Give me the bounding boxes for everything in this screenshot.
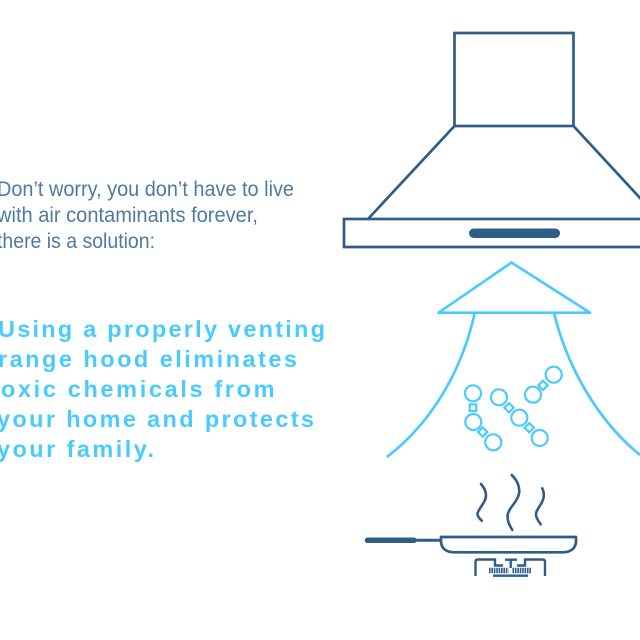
solution statement: range hood eliminates — [0, 346, 297, 372]
hood base — [344, 219, 640, 247]
intro text block: with air contaminants forever, — [0, 204, 258, 227]
solution statement: your home and protects — [0, 406, 314, 432]
icon: range hood — [344, 33, 640, 247]
arrow: air rising into hood — [387, 262, 640, 457]
pan handle — [368, 538, 414, 543]
burner centre post — [505, 560, 517, 568]
icon: gas burner — [476, 560, 545, 576]
burner right support — [517, 560, 545, 576]
hood canopy — [368, 126, 640, 219]
solution statement: your family. — [0, 436, 154, 462]
burner base — [493, 575, 528, 577]
intro text block: Don’t worry, you don’t have to live — [0, 178, 294, 201]
pan body — [441, 537, 576, 552]
icon: frying pan — [368, 537, 576, 552]
right air flow curve — [554, 313, 640, 455]
hood chimney — [454, 33, 574, 126]
left air flow curve — [387, 313, 475, 457]
hood light bar — [469, 228, 560, 238]
solution statement — [0, 316, 325, 462]
icon: contaminant molecules — [465, 367, 562, 450]
intro text block — [0, 178, 294, 253]
solution statement: Using a properly venting — [0, 316, 325, 342]
molecule: left — [465, 385, 501, 450]
burner flame ports — [489, 568, 531, 573]
intro text block: there is a solution: — [0, 230, 155, 253]
icon: steam — [477, 475, 544, 530]
molecule: right — [525, 367, 562, 403]
burner left support — [476, 560, 503, 576]
arrow head — [438, 262, 590, 313]
molecule: centre — [491, 389, 548, 446]
